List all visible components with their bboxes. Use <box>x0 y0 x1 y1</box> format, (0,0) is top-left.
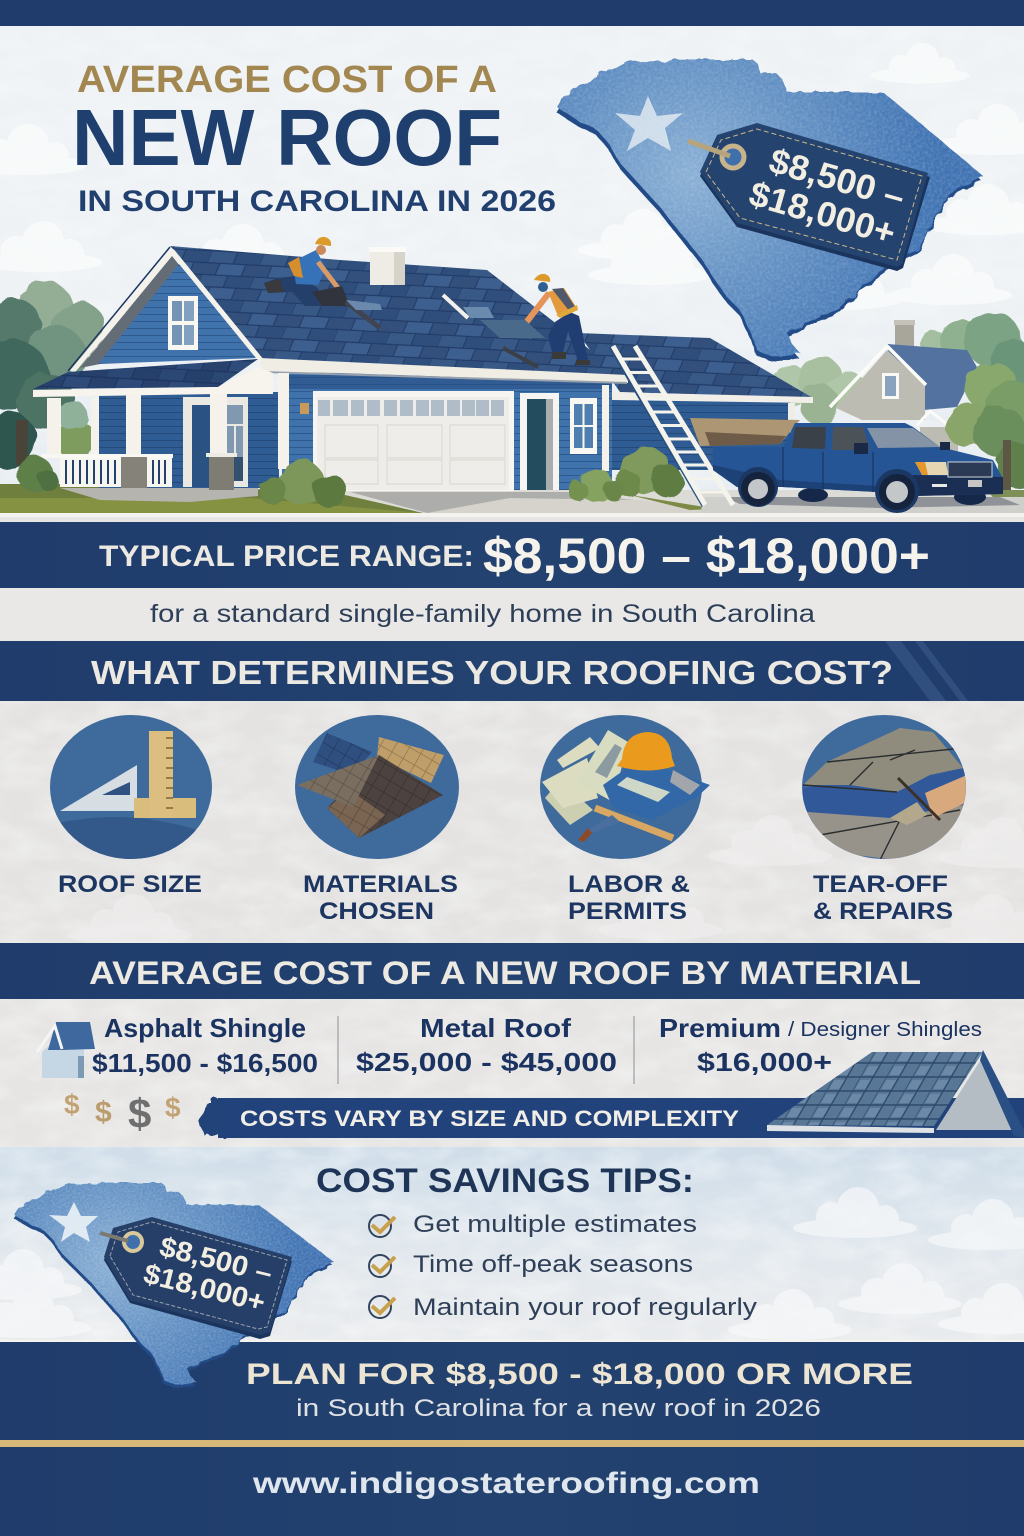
top band <box>0 0 1024 26</box>
neighbor house <box>830 320 977 452</box>
icon: tear-off and repairs <box>802 715 967 860</box>
main roof <box>170 246 620 376</box>
lumber load <box>690 418 800 446</box>
label: materials chosen: MATERIALS <box>303 871 458 898</box>
label: materials chosen: CHOSEN <box>319 898 434 925</box>
price tag <box>688 123 930 271</box>
icon: dollar signs: $ <box>95 1096 112 1129</box>
railing <box>41 454 173 487</box>
shrubs <box>17 446 684 508</box>
icon: dollar signs: $ <box>64 1089 80 1120</box>
porch wall <box>99 392 279 488</box>
heading band: cost by material <box>0 943 1024 999</box>
side window <box>570 398 597 454</box>
title <box>72 59 556 218</box>
premium shingles cost: Premium <box>659 1013 781 1043</box>
front door <box>183 394 248 487</box>
price range band <box>0 522 1024 588</box>
foreground tree right <box>945 362 1024 490</box>
columns <box>47 394 141 456</box>
gable trim <box>72 252 172 372</box>
metal roof cost: $25,000 - $45,000 <box>356 1047 617 1077</box>
title: IN SOUTH CAROLINA IN 2026 <box>78 185 556 218</box>
heading band: determines cost <box>0 641 1024 701</box>
ladder <box>610 346 733 506</box>
price range band: TYPICAL PRICE RANGE: <box>99 540 474 573</box>
asphalt shingle cost <box>92 1013 318 1078</box>
label: tear-off and repairs <box>813 871 953 925</box>
icon: materials <box>295 715 459 859</box>
gable wall <box>98 264 257 364</box>
trees left <box>0 281 105 468</box>
panel: cost savings tips <box>0 1147 1024 1342</box>
roof illustration <box>767 1050 1024 1138</box>
small price tag: $8,500 – <box>157 1231 276 1289</box>
icon: dollar signs: $ <box>165 1092 181 1123</box>
porch roof <box>33 359 258 389</box>
price subtext <box>0 588 1024 641</box>
icon: dollar signs <box>64 1089 181 1137</box>
label: tear-off and repairs: TEAR-OFF <box>813 871 948 898</box>
price subtext: for a standard single-family home in South Carolina <box>150 600 815 628</box>
label: labor and permits <box>568 871 690 925</box>
wall light <box>300 403 309 414</box>
footer band: plan: in South Carolina for a new roof in 2026 <box>296 1395 821 1422</box>
price tag: $8,500 – <box>765 141 909 217</box>
icon: roof size <box>50 715 212 860</box>
roof repair patches <box>443 295 545 367</box>
title: NEW ROOF <box>72 93 502 182</box>
side door <box>520 393 559 490</box>
panel: hero <box>0 26 1024 517</box>
icon: small house <box>37 1022 95 1078</box>
worker one <box>264 237 382 328</box>
premium shingles cost: $16,000+ <box>697 1047 832 1077</box>
heading band: cost by material: AVERAGE COST OF A NEW ROOF BY MATERIAL <box>89 955 921 991</box>
panel: materials <box>0 999 1024 1147</box>
label: labor and permits: LABOR & <box>568 871 690 898</box>
label: roof size: ROOF SIZE <box>58 871 202 898</box>
label: materials chosen <box>303 871 458 925</box>
panel: cost factors <box>0 701 1024 945</box>
icon: star <box>615 96 683 151</box>
house <box>33 237 813 506</box>
metal roof cost: Metal Roof <box>420 1013 571 1043</box>
fascia <box>260 358 628 383</box>
tip two: Time off-peak seasons <box>413 1251 693 1278</box>
asphalt shingle cost: $11,500 - $16,500 <box>92 1048 318 1078</box>
banner: costs vary: COSTS VARY BY SIZE AND COMPLEXITY <box>240 1106 739 1131</box>
small state map with tag <box>14 1183 333 1388</box>
label: labor and permits: PERMITS <box>568 898 687 925</box>
gable window <box>168 296 198 350</box>
metal roof cost <box>356 1013 617 1077</box>
website band <box>0 1447 1024 1536</box>
footer band: plan: PLAN FOR $8,500 - $18,000 OR MORE <box>246 1358 913 1391</box>
icon: dollar signs: $ <box>128 1090 151 1137</box>
price tag: $18,000+ <box>745 174 900 253</box>
tip one: Get multiple estimates <box>413 1211 697 1238</box>
stone bases <box>121 453 237 490</box>
premium shingles cost <box>659 1013 982 1077</box>
tip three: Maintain your roof regularly <box>413 1294 757 1321</box>
chimney <box>369 247 406 285</box>
gold divider <box>0 1440 1024 1447</box>
footer band: plan <box>0 1342 1024 1440</box>
truck <box>713 423 1003 513</box>
small price tag: $18,000+ <box>141 1258 268 1318</box>
website band: www.indigostateroofing.com <box>252 1467 760 1500</box>
background trees right <box>770 312 1024 425</box>
label: tear-off and repairs: & REPAIRS <box>813 898 953 925</box>
icon: labor and permits <box>540 715 710 859</box>
state map with price tag <box>557 60 982 362</box>
small price tag <box>100 1217 292 1339</box>
gable soffit <box>80 256 180 368</box>
garage door <box>313 391 514 491</box>
ground <box>0 484 1024 517</box>
heading: COST SAVINGS TIPS: <box>316 1162 694 1200</box>
worker two <box>507 274 590 365</box>
icon: small star <box>49 1202 98 1242</box>
asphalt shingle cost: Asphalt Shingle <box>104 1013 306 1043</box>
premium shingles cost: / Designer Shingles <box>788 1019 982 1041</box>
right wing <box>578 333 813 470</box>
banner: costs vary <box>198 1098 1024 1138</box>
title: AVERAGE COST OF A <box>77 59 497 101</box>
heading band: determines cost: WHAT DETERMINES YOUR ROOFING COST? <box>91 654 893 691</box>
price range band: $8,500 – $18,000+ <box>483 528 930 584</box>
main wall <box>282 372 612 490</box>
